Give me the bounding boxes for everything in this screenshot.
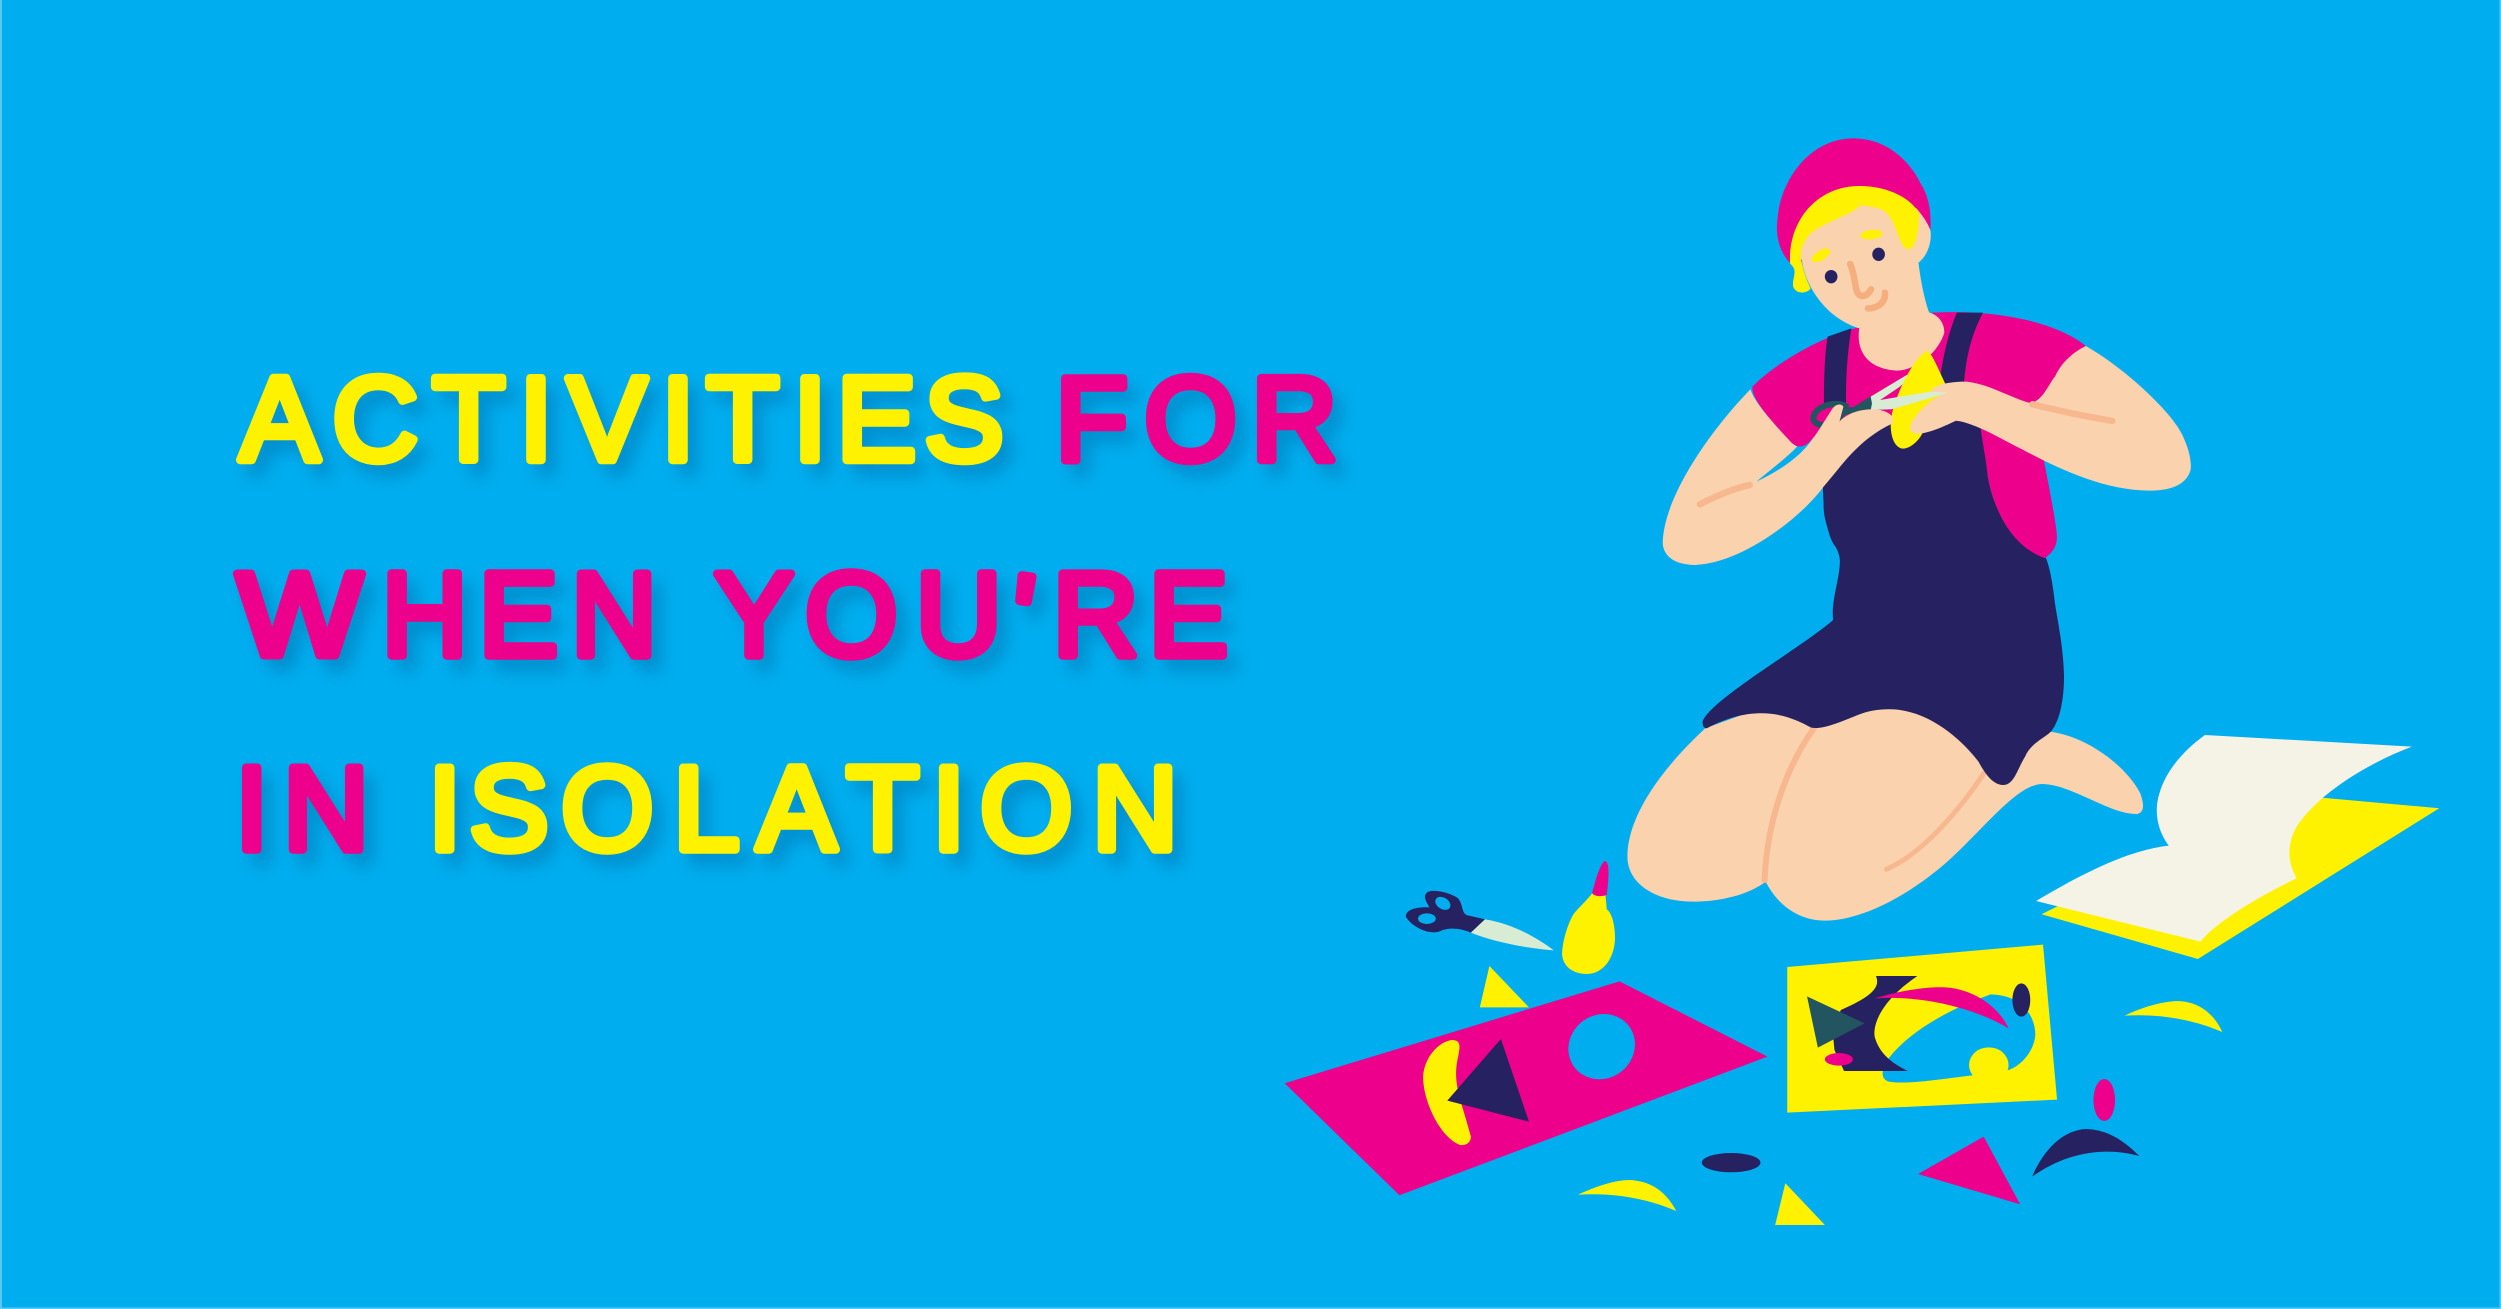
hat [1777,138,1931,264]
arm crease left [1700,485,1750,504]
navy ellipse [1702,1153,1760,1172]
yellow crescent bottom [1578,1180,1676,1211]
overalls torso [1823,420,2051,580]
open book [2036,735,2439,959]
glue bottle [1562,861,1615,974]
mouth [1868,293,1885,308]
legs [1627,700,2143,921]
title line 1: ACTIVITIES [240,354,1004,486]
arm crease right [2032,404,2112,421]
yellow triangle top [1480,966,1529,1007]
illustration: kneeling person [1627,138,2191,921]
overall strap right [1939,313,1983,383]
eyes [1872,248,1885,261]
overall strap left [1824,328,1851,407]
craft items on floor [1285,861,2222,1225]
scissor blade [1871,392,1950,410]
magenta paper [1285,981,1767,1195]
overalls lower [1703,500,2064,785]
arm left [1663,389,1893,565]
face and neck [1796,195,1944,371]
magenta triangle [1918,1137,2020,1204]
shirt [1752,312,2086,558]
magenta ellipse [2093,1079,2115,1121]
upper body [1663,138,2191,580]
nose [1850,264,1871,296]
title [235,354,1337,875]
scissors in hand [1813,404,1847,425]
yellow paper in hand [1891,351,1948,449]
hair [1790,186,1919,292]
title line 2: YOU'RE [714,549,1228,684]
title line 3: IN [235,743,369,875]
title line 1: FOR [1056,354,1337,486]
scissors [1406,891,1554,950]
title line 2: W [237,549,362,681]
title line 2: HEN [382,549,657,681]
arm right [1910,346,2191,491]
navy crescent [2032,1129,2139,1177]
yellow triangle bottom [1775,1183,1825,1225]
yellow crescent right [2125,1001,2222,1032]
yellow paper with cutouts [1787,945,2057,1113]
eyebrows [1860,229,1883,241]
title line 3: ISOLATION [428,743,1178,875]
